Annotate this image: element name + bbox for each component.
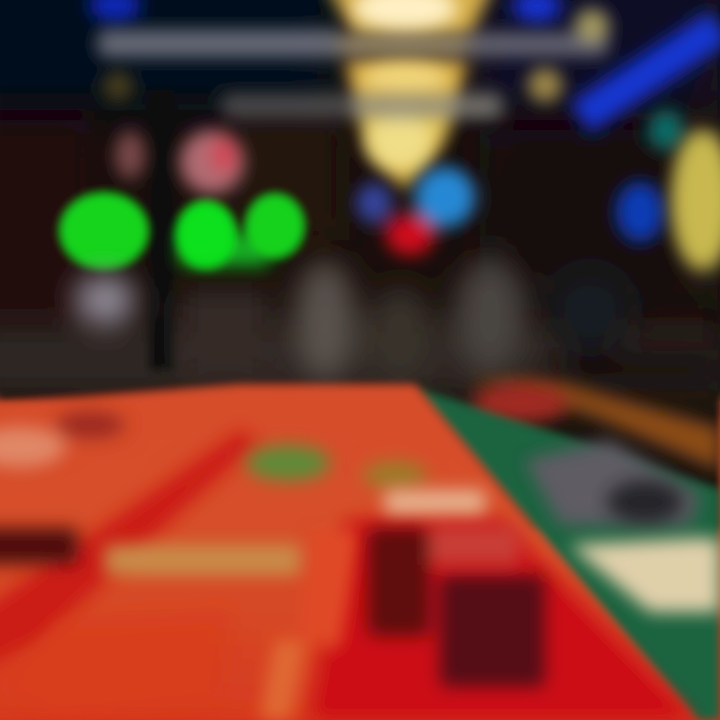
dark pillar	[150, 90, 174, 370]
icon: lights right	[616, 110, 720, 270]
heading: blurred title line 2	[103, 68, 562, 118]
pink lights	[115, 130, 244, 194]
icon: coloured lights center	[356, 167, 475, 255]
blue diagonal neon light	[580, 26, 720, 118]
table edge: right wood rail	[470, 380, 720, 470]
blurred crowd figures	[75, 257, 720, 390]
background: dark hall	[0, 0, 720, 530]
table: red and orange felt	[0, 385, 695, 720]
table: panels on green felt	[525, 440, 720, 612]
table: text markings	[0, 411, 485, 715]
table: green oval markings	[246, 445, 427, 489]
heading: blurred title line 1	[98, 9, 609, 57]
icon: golden chandelier	[325, 0, 495, 190]
icon: green lights	[60, 193, 304, 269]
dark chips at left	[0, 528, 78, 564]
stack of dark chips	[368, 525, 545, 687]
table: green felt	[415, 388, 720, 720]
ceiling blue lights	[89, 0, 561, 22]
